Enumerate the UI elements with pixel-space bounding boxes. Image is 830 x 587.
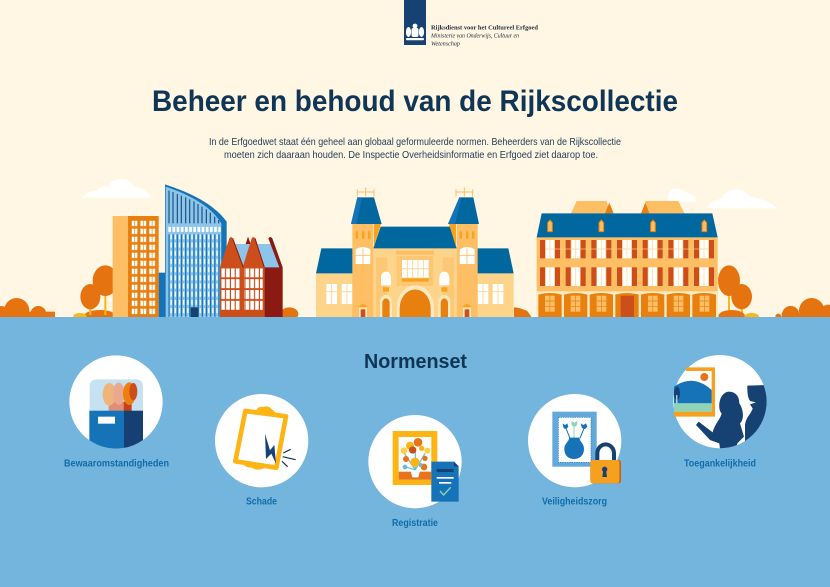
- clouds right: [668, 188, 777, 208]
- norm: Toegankelijkheid: [673, 355, 768, 470]
- museum wings: [316, 248, 514, 318]
- bush left of house: [520, 310, 529, 319]
- label: Registratie: [392, 518, 438, 529]
- label: Veiligheidszorg: [542, 496, 607, 508]
- museum finials: [357, 187, 473, 197]
- logo: Wetenschap: [431, 40, 460, 48]
- intro text: In de Erfgoedwet staat één geheel aan globaal geformuleerde normen. Beheerders van de Rijkscollectie: [209, 137, 621, 148]
- bush right of houses: [280, 307, 298, 321]
- trees right: [718, 265, 759, 322]
- heading: Normenset: Normenset: [364, 351, 467, 373]
- painting: [674, 367, 715, 417]
- logo: [404, 0, 538, 48]
- blue tower: [159, 184, 227, 318]
- norm: Registratie: [368, 415, 462, 529]
- intro text: moeten zich daaraan houden. De Inspectie Overheidsinformatie en Erfgoed ziet daarop toe.: [224, 150, 598, 161]
- norm: Bewaaromstandigheden: [64, 355, 169, 470]
- norm: Schade: [215, 394, 308, 508]
- museum central roof: [373, 227, 457, 248]
- red houses: [220, 237, 283, 318]
- orange tower: [113, 216, 159, 318]
- Rijksmuseum building: [316, 187, 532, 318]
- visitors: [696, 385, 768, 449]
- bush right of museum: [514, 307, 532, 318]
- icon: painting with document: [368, 415, 462, 508]
- bushes left: [0, 298, 116, 323]
- blue panel: [0, 317, 830, 587]
- yellow shrub: [73, 313, 87, 320]
- label: Schade: [246, 496, 277, 508]
- skyline left: modern city: [0, 179, 298, 323]
- icon: cracked frame: [215, 394, 308, 487]
- label: Toegankelijkheid: [684, 458, 756, 470]
- title: Beheer en behoud van de Rijkscollectie: [152, 85, 678, 118]
- cloud left: [82, 179, 152, 198]
- museum towers: [351, 197, 479, 318]
- icon: visitors looking at painting: [673, 355, 768, 449]
- trees left: [80, 265, 118, 315]
- museum central block: [373, 248, 457, 318]
- icon: display case: [69, 355, 163, 451]
- icon: secured painting with padlock: [528, 394, 621, 487]
- logo: Rijksdienst voor het Cultureel Erfgoed: [431, 24, 538, 31]
- label: Bewaaromstandigheden: [64, 458, 169, 470]
- bushes right: [775, 298, 830, 323]
- house ground floor: [537, 291, 718, 318]
- grand house and right landscape: [520, 188, 830, 323]
- house roof: [537, 213, 718, 237]
- intro text: [209, 137, 621, 161]
- logo: Ministerie van Onderwijs, Cultuur en: [430, 32, 519, 39]
- house dormers: [571, 201, 684, 213]
- house body: [537, 237, 718, 318]
- norm: Veiligheidszorg: [528, 394, 621, 508]
- house upper windows: [540, 240, 714, 286]
